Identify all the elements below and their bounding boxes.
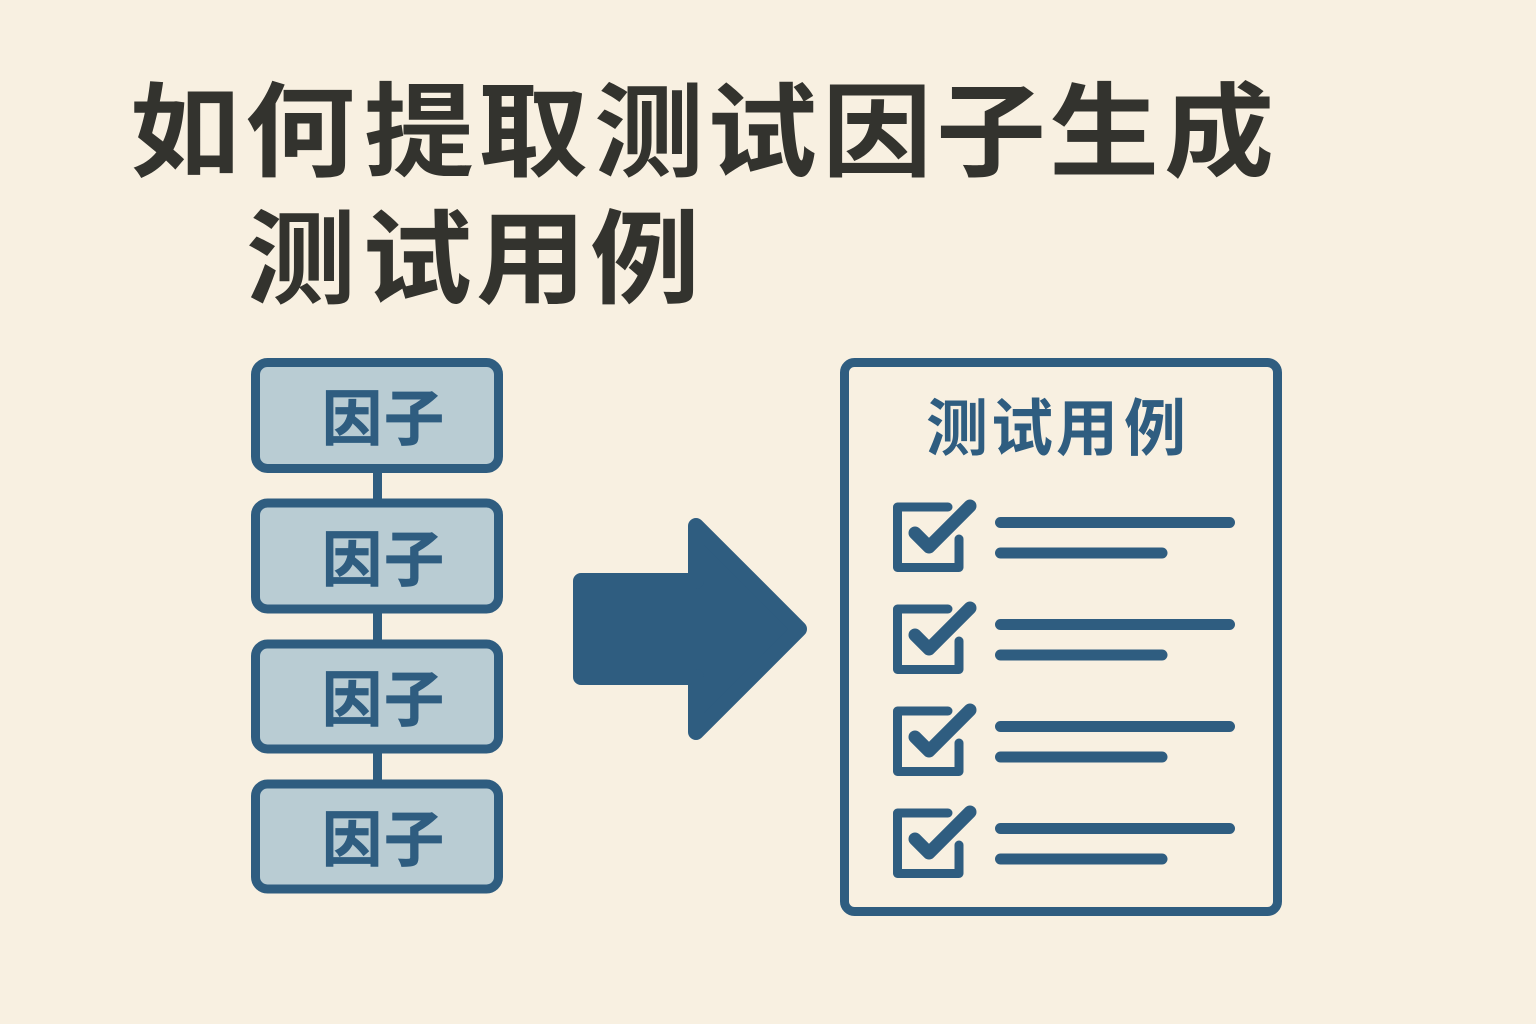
factor box 2 — [256, 503, 498, 609]
factor box 1 — [256, 362, 498, 468]
title — [130, 76, 1274, 317]
factor box 2: 因子 — [322, 527, 444, 594]
document frame — [844, 362, 1278, 912]
factor box 3 — [256, 644, 498, 749]
title: 如何提取测试因子生成 — [130, 76, 1274, 190]
factor box 1: 因子 — [322, 386, 444, 453]
checklist row 1 — [898, 506, 1230, 568]
factor box 4: 因子 — [322, 807, 444, 874]
title: 测试用例 — [246, 203, 700, 317]
arrow — [581, 526, 799, 732]
factor box 3: 因子 — [322, 667, 444, 734]
panel: factor stack — [256, 362, 498, 889]
panel: test case document — [844, 362, 1278, 912]
checklist row 4 — [898, 812, 1230, 874]
factor box 4 — [256, 784, 498, 889]
document heading: 测试用例 — [926, 395, 1186, 464]
connectors — [373, 470, 382, 783]
checklist row 3 — [898, 710, 1230, 772]
checklist row 2 — [898, 608, 1230, 670]
